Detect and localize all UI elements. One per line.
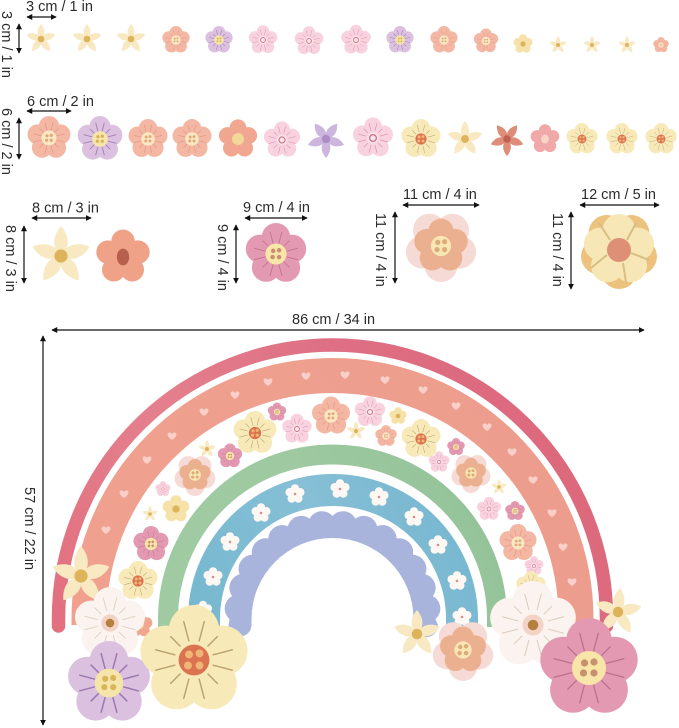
flower xyxy=(355,396,385,426)
dimension label: 57 cm height: 57 cm / 22 in xyxy=(21,487,37,570)
flower xyxy=(429,451,449,472)
flower: big purple xyxy=(68,641,150,721)
arrow: 3 cm width xyxy=(27,16,56,18)
heart xyxy=(381,376,389,384)
arrow: 57 cm height xyxy=(42,336,44,725)
flower xyxy=(491,479,507,495)
dimension label: 9 cm height: 9 cm / 4 in xyxy=(214,224,230,291)
flower xyxy=(155,481,171,496)
flower xyxy=(312,396,350,433)
dimension label: 6 cm width: 6 cm / 2 in xyxy=(27,94,94,110)
flower: salmon xyxy=(162,26,190,53)
hearts on salmon band xyxy=(102,371,576,586)
flower: purple xyxy=(386,26,414,53)
heart xyxy=(529,476,537,484)
flower: cream xyxy=(645,123,677,153)
flower: purple xyxy=(78,116,122,160)
flower: salmon xyxy=(430,26,458,53)
heart xyxy=(548,509,556,517)
flower xyxy=(524,556,544,575)
flower: peach xyxy=(422,607,506,690)
flower: salmon xyxy=(474,28,498,52)
flower xyxy=(282,414,312,443)
dimension label: 11 cm width: 11 cm / 4 in xyxy=(403,187,477,203)
heart xyxy=(102,526,110,534)
flower: white xyxy=(75,587,145,655)
flower xyxy=(445,445,499,499)
rainbow xyxy=(50,345,645,721)
mini flower xyxy=(194,601,212,618)
dimension label: 12 cm width: 12 cm / 5 in xyxy=(581,187,656,203)
band: green xyxy=(168,454,497,627)
heart xyxy=(231,391,239,399)
flower: purple xyxy=(205,26,233,53)
flower: small star 3 xyxy=(116,24,146,53)
mini flower xyxy=(404,507,424,526)
heart xyxy=(168,432,176,440)
arrow: 3 cm height xyxy=(18,24,20,53)
band: scalloped lavender xyxy=(225,511,440,637)
flower xyxy=(268,402,286,421)
flower: pink xyxy=(295,26,323,54)
arrow: 9 cm width xyxy=(245,217,307,219)
band: red xyxy=(58,345,606,626)
mini white flowers on blue band xyxy=(194,479,472,626)
flower: tiny star xyxy=(549,36,567,53)
heart xyxy=(568,578,576,586)
flower: star xyxy=(50,546,112,604)
arrow: 6 cm width xyxy=(27,110,71,112)
flower: cream xyxy=(606,123,638,153)
flower: white xyxy=(490,581,576,664)
flower: cream xyxy=(566,123,598,153)
flower: 8 cm orange xyxy=(96,230,150,281)
mini flower xyxy=(428,535,448,554)
heart xyxy=(143,456,151,464)
arrow: 9 cm height xyxy=(235,225,237,283)
heart xyxy=(302,372,310,380)
flower: pink xyxy=(249,25,277,53)
dimension label: 8 cm height: 8 cm / 3 in xyxy=(2,225,18,292)
heart xyxy=(120,490,128,498)
flower: pink xyxy=(264,121,300,157)
flower xyxy=(142,506,158,522)
dimension label: 8 cm width: 8 cm / 3 in xyxy=(32,200,99,216)
mini flower xyxy=(330,479,350,498)
dimension label: 11 cm height: 11 cm / 4 in xyxy=(372,213,388,287)
flower: plain pink xyxy=(531,124,559,152)
flower xyxy=(167,446,224,502)
arrow: 11 cm width xyxy=(403,204,479,206)
mini flower xyxy=(447,571,467,590)
mini flower xyxy=(369,487,389,506)
flower xyxy=(375,425,397,446)
dimension label: 86 cm width: 86 cm / 34 in xyxy=(292,312,375,328)
dimension label: 11 cm height: 11 cm / 4 in xyxy=(549,213,565,287)
flower xyxy=(402,419,440,457)
flower: star xyxy=(592,586,645,637)
mini flower xyxy=(285,484,305,503)
heart xyxy=(559,543,567,551)
flower: tiny star xyxy=(618,36,636,53)
heart xyxy=(508,448,516,456)
row 2: 6 cm flowers xyxy=(0,94,677,175)
heart xyxy=(200,408,208,416)
flowers between salmon and green bands xyxy=(119,396,546,599)
heart xyxy=(419,386,427,394)
flower xyxy=(119,561,157,599)
flower: small star 1 xyxy=(26,24,56,53)
band: blue xyxy=(204,490,462,627)
flower xyxy=(505,501,525,520)
arrow: 86 cm width xyxy=(52,329,644,331)
flower: tiny star xyxy=(583,36,601,53)
flower: small star 2 xyxy=(72,24,102,53)
flower xyxy=(389,407,407,424)
flower: 9 cm rose xyxy=(246,223,306,282)
dimension label: 9 cm width: 9 cm / 4 in xyxy=(243,200,310,216)
flower: salmon xyxy=(28,116,70,158)
arrow: 11 cm height xyxy=(394,212,396,283)
flower xyxy=(346,422,366,440)
flower: tiny salmon xyxy=(653,37,669,52)
flower: pink xyxy=(353,117,393,156)
row 1: 3 cm flowers xyxy=(0,0,669,78)
arrow: 8 cm width xyxy=(32,217,91,219)
flower: star xyxy=(447,121,483,156)
flower: star xyxy=(392,610,442,657)
flower xyxy=(234,411,276,453)
foreground flower cluster: left xyxy=(50,546,248,721)
flower xyxy=(516,571,546,599)
flower: 12 cm layered cream xyxy=(568,196,673,301)
arrow: 12 cm width xyxy=(580,204,659,206)
mini flower xyxy=(452,607,472,626)
mini flower xyxy=(220,532,240,551)
band: salmon xyxy=(89,376,576,625)
flower: cream xyxy=(402,119,440,157)
flower: salmon xyxy=(129,119,167,157)
heart xyxy=(452,402,460,410)
flower: 8 cm star xyxy=(30,226,92,284)
flower: big cream xyxy=(140,605,248,709)
flower: 11 cm peach xyxy=(394,196,491,293)
arrow: 8 cm height xyxy=(23,226,25,283)
row 3: large single flowers xyxy=(2,187,673,301)
arrow: 11 cm height xyxy=(570,212,572,289)
mini flower xyxy=(251,503,271,522)
flower xyxy=(218,444,242,467)
flower xyxy=(477,497,501,520)
flower xyxy=(133,526,169,560)
overall dimensions xyxy=(21,312,644,725)
flower: purple star xyxy=(300,112,353,165)
flower: pink xyxy=(341,25,371,54)
flower: red star xyxy=(484,115,531,162)
flower xyxy=(447,438,465,455)
flower: salmon xyxy=(173,119,211,157)
flower xyxy=(198,440,216,457)
mini flower xyxy=(203,567,223,586)
flower xyxy=(163,495,189,521)
heart xyxy=(483,423,491,431)
flower: small cream xyxy=(513,34,533,53)
flower: tan xyxy=(219,119,257,156)
arrow: 6 cm height xyxy=(18,118,20,159)
heart xyxy=(264,378,272,386)
foreground flower cluster: right xyxy=(392,581,645,713)
heart xyxy=(341,371,349,379)
flower xyxy=(499,524,537,560)
flower: salmon peeking behind xyxy=(128,612,152,636)
flower: big rose xyxy=(540,618,638,713)
